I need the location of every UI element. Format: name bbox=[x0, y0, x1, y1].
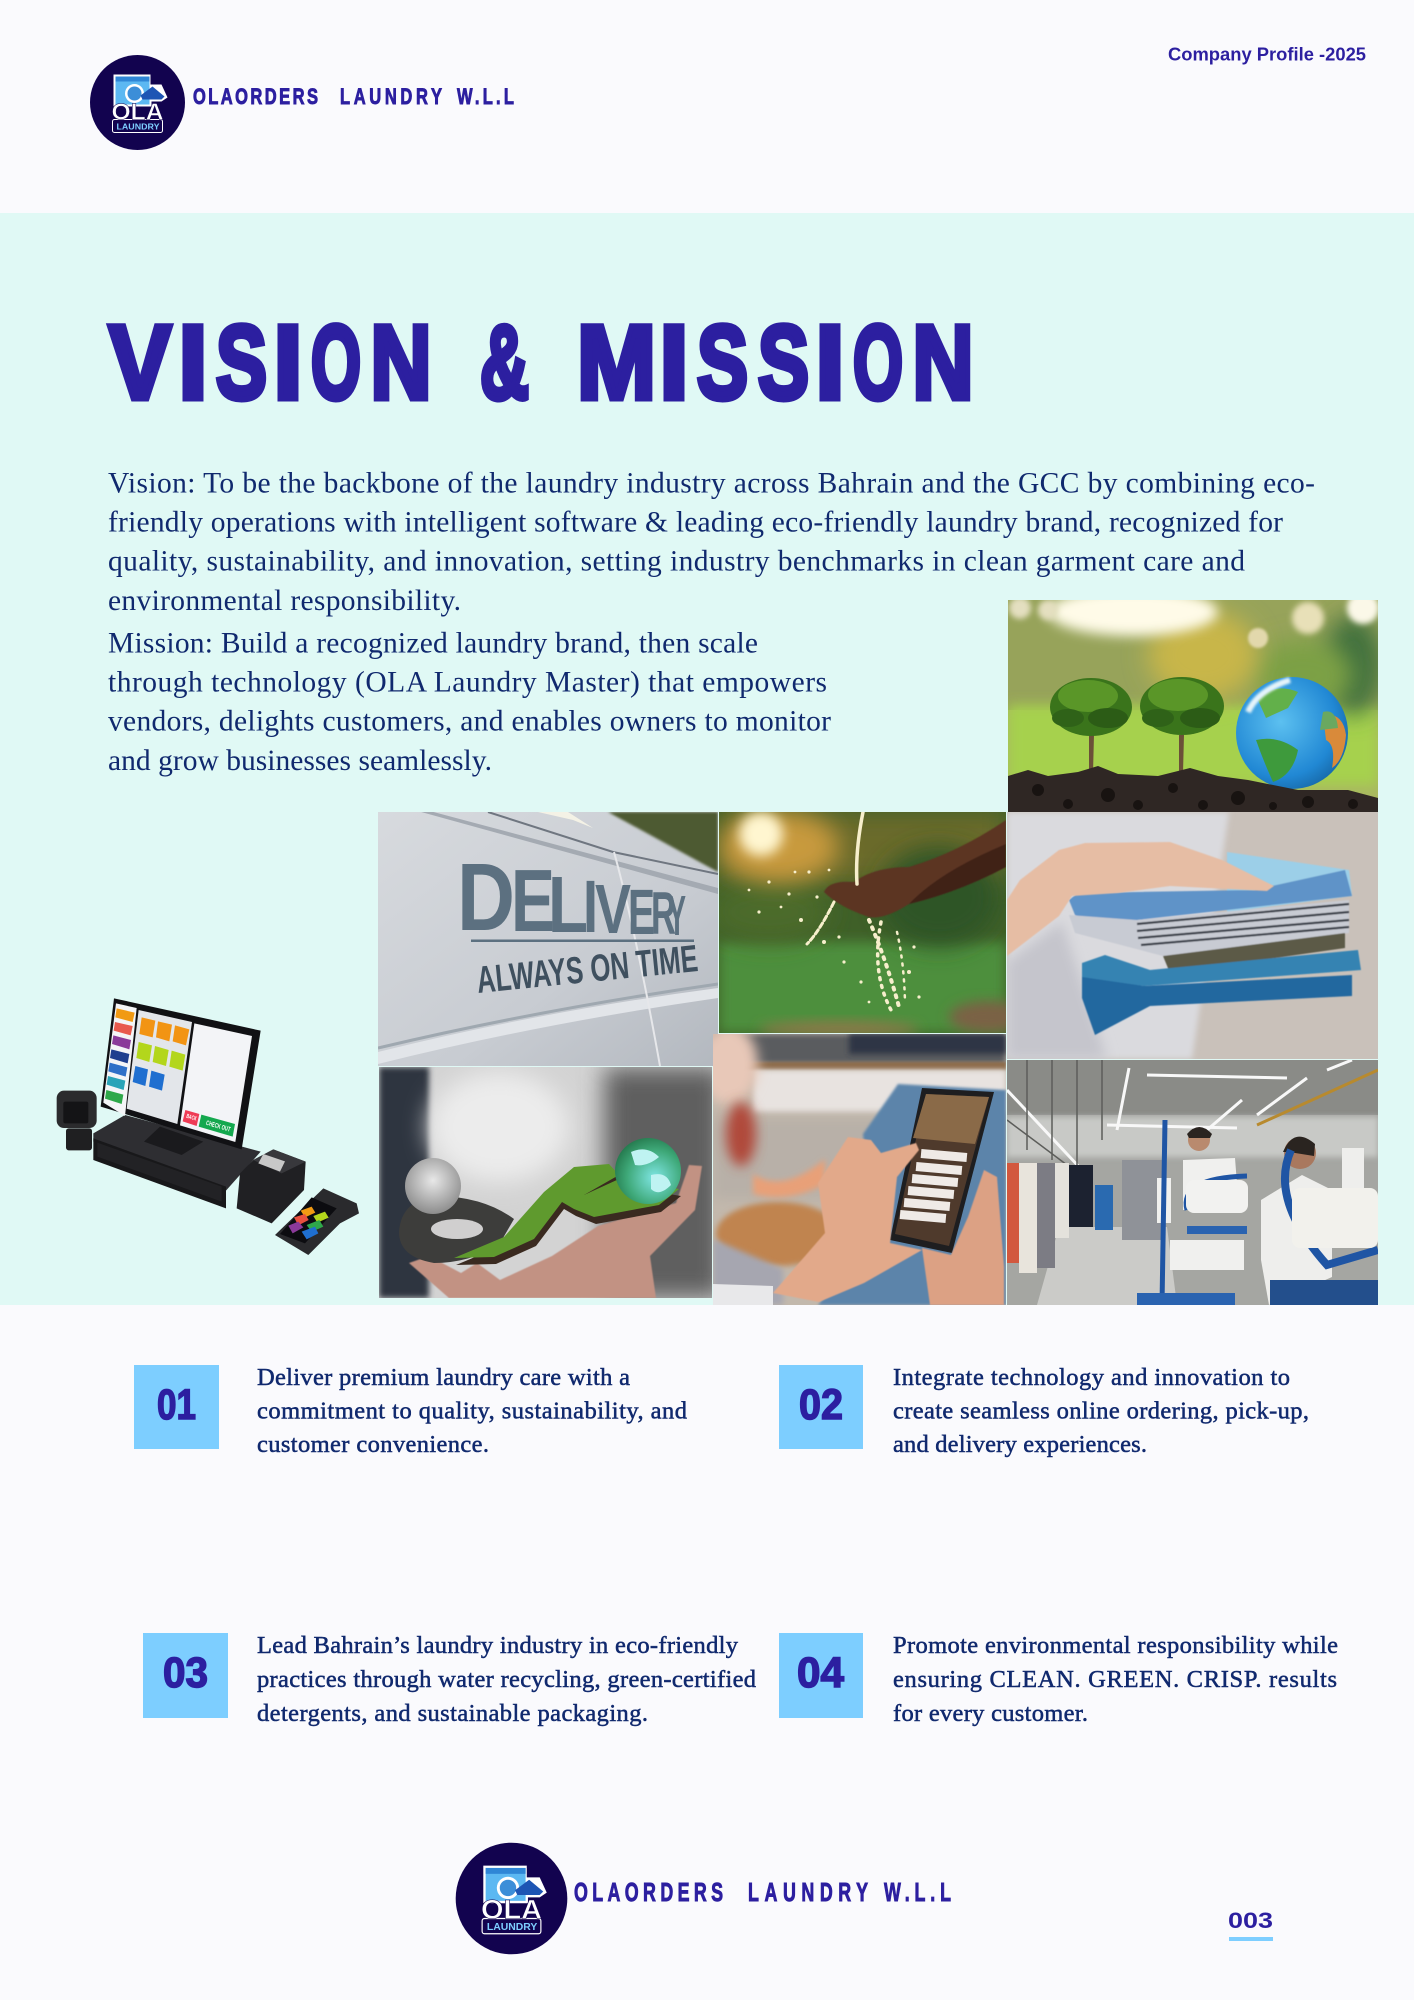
title: N bbox=[370, 305, 432, 422]
item 04 badge: 04 bbox=[797, 1649, 844, 1697]
globe bbox=[1236, 677, 1348, 789]
item 03 text bbox=[257, 1632, 756, 1727]
card terminal bbox=[275, 1188, 359, 1255]
phone bbox=[890, 1088, 994, 1253]
item 04 badge bbox=[779, 1633, 863, 1718]
tree left bbox=[1050, 678, 1132, 773]
title: & bbox=[480, 305, 529, 422]
header logo: OLA bbox=[112, 98, 164, 124]
camera bbox=[57, 1091, 97, 1150]
van lettering: D bbox=[457, 844, 515, 951]
title: S bbox=[697, 305, 748, 422]
item 01 text: Deliver premium laundry care with a bbox=[257, 1364, 630, 1391]
title: S bbox=[758, 305, 809, 422]
van lettering: R bbox=[651, 880, 676, 947]
tree right bbox=[1140, 677, 1224, 773]
monitor bbox=[101, 998, 261, 1149]
text block: mission bbox=[108, 628, 831, 777]
footer company name: W.L.L bbox=[884, 1878, 951, 1907]
monitor: CHECK OUT bbox=[205, 1120, 231, 1133]
title: O bbox=[853, 305, 903, 422]
header company name: LAUNDRY bbox=[340, 85, 442, 110]
item 04 text bbox=[893, 1632, 1338, 1727]
photo: delivery van bbox=[378, 812, 718, 1066]
illustration: POS system bbox=[57, 998, 359, 1255]
text block: mission: vendors, delights customers, and enables owners to monitor bbox=[108, 706, 831, 738]
text block: vision: Vision: To be the backbone of the laundry industry across Bahrain and the GCC by combining eco- bbox=[108, 468, 1315, 500]
open hand bbox=[409, 1165, 702, 1298]
green globe bbox=[615, 1138, 681, 1204]
item 03 text: practices through water recycling, green-certified bbox=[257, 1666, 756, 1693]
photo: folded towels bbox=[1007, 812, 1378, 1059]
footer logo bbox=[456, 1843, 567, 1954]
photo: delivery van: Y bbox=[668, 884, 686, 948]
item 02 text: create seamless online ordering, pick-up, bbox=[893, 1398, 1309, 1424]
title: M bbox=[577, 305, 656, 422]
footer logo: OLA bbox=[481, 1894, 542, 1924]
item 02 text bbox=[893, 1364, 1309, 1458]
footer logo: LAUNDRY bbox=[487, 1922, 538, 1933]
title: I bbox=[660, 305, 688, 422]
item 03 text: detergents, and sustainable packaging. bbox=[257, 1700, 648, 1727]
text block: vision: environmental responsibility. bbox=[108, 585, 461, 617]
van lettering: I bbox=[583, 865, 598, 948]
item 02 text: Integrate technology and innovation to bbox=[893, 1364, 1290, 1391]
receipt printer bbox=[237, 1149, 306, 1223]
item 04 text: Promote environmental responsibility while bbox=[893, 1632, 1338, 1659]
pressing equipment bbox=[1137, 1120, 1378, 1305]
header document label: Company Profile -2025 bbox=[1168, 44, 1366, 64]
footer company name: LAUNDRY bbox=[748, 1878, 868, 1907]
item 01 text: commitment to quality, sustainability, and bbox=[257, 1398, 687, 1424]
van lettering: E bbox=[511, 851, 555, 950]
title: I bbox=[816, 305, 844, 422]
monitor: BACK bbox=[185, 1114, 198, 1123]
item 02 text: and delivery experiences. bbox=[893, 1431, 1147, 1458]
footer company name: OLAORDERS bbox=[574, 1878, 723, 1907]
workers bbox=[1157, 1127, 1364, 1305]
item 01 badge bbox=[134, 1365, 219, 1449]
photo: water over hand bbox=[719, 812, 1006, 1033]
silver globe bbox=[405, 1158, 461, 1214]
hand bbox=[1007, 842, 1274, 956]
jeans bbox=[818, 1084, 1006, 1305]
header company name: W.L.L bbox=[457, 85, 514, 110]
cash drawer bbox=[93, 1115, 261, 1208]
item 02 badge: 02 bbox=[799, 1381, 843, 1429]
arm and cupped hand bbox=[824, 820, 1006, 917]
hands bbox=[773, 1137, 922, 1302]
garments rack bbox=[1007, 1163, 1093, 1273]
text block: vision: friendly operations with intelligent software & leading eco-friendly laundry brand, recognized for bbox=[108, 507, 1283, 539]
monitor stand bbox=[144, 1127, 203, 1155]
soil bbox=[1008, 766, 1378, 812]
title: O bbox=[311, 305, 361, 422]
photo: laundry factory bbox=[1007, 1060, 1378, 1305]
van lettering: E bbox=[628, 876, 655, 948]
item 01 badge: 01 bbox=[157, 1381, 196, 1429]
title: N bbox=[912, 305, 974, 422]
item 01 text bbox=[257, 1364, 687, 1458]
towel stack bbox=[1069, 852, 1361, 1035]
item 04 text: for every customer. bbox=[893, 1700, 1088, 1727]
title: S bbox=[216, 305, 267, 422]
item 03 text: Lead Bahrain’s laundry industry in eco-friendly bbox=[257, 1632, 739, 1659]
title: I bbox=[178, 305, 208, 422]
text block: mission: and grow businesses seamlessly. bbox=[108, 745, 492, 777]
item 02 badge bbox=[779, 1365, 863, 1449]
item 03 badge bbox=[143, 1633, 228, 1718]
page number: 003 bbox=[1228, 1908, 1273, 1933]
header logo bbox=[90, 55, 185, 150]
item 03 badge: 03 bbox=[163, 1649, 208, 1697]
text block: mission: through technology (OLA Laundry Master) that empowers bbox=[108, 667, 827, 699]
header logo: LAUNDRY bbox=[116, 122, 160, 132]
item 04 text: ensuring CLEAN. GREEN. CRISP. results bbox=[893, 1666, 1337, 1693]
title: I bbox=[274, 305, 302, 422]
text block: mission: Mission: Build a recognized laundry brand, then scale bbox=[108, 628, 758, 660]
photo: circular economy hand bbox=[379, 1067, 712, 1298]
text block: vision: quality, sustainability, and innovation, setting industry benchmarks in clean garment care and bbox=[108, 546, 1245, 578]
photo: trees and globe bbox=[1008, 600, 1378, 812]
text block: vision bbox=[108, 468, 1315, 617]
title: V bbox=[109, 305, 171, 422]
water stream bbox=[807, 812, 905, 1010]
page number bbox=[1228, 1908, 1273, 1941]
infinity loop bbox=[399, 1164, 681, 1265]
item 01 text: customer convenience. bbox=[257, 1431, 489, 1458]
panel: mint hero band bbox=[0, 213, 1414, 1305]
van lettering: L bbox=[548, 860, 588, 949]
header company name: OLAORDERS bbox=[193, 85, 318, 110]
photo: phone food ordering bbox=[713, 1034, 1006, 1305]
van lettering: V bbox=[595, 870, 631, 948]
